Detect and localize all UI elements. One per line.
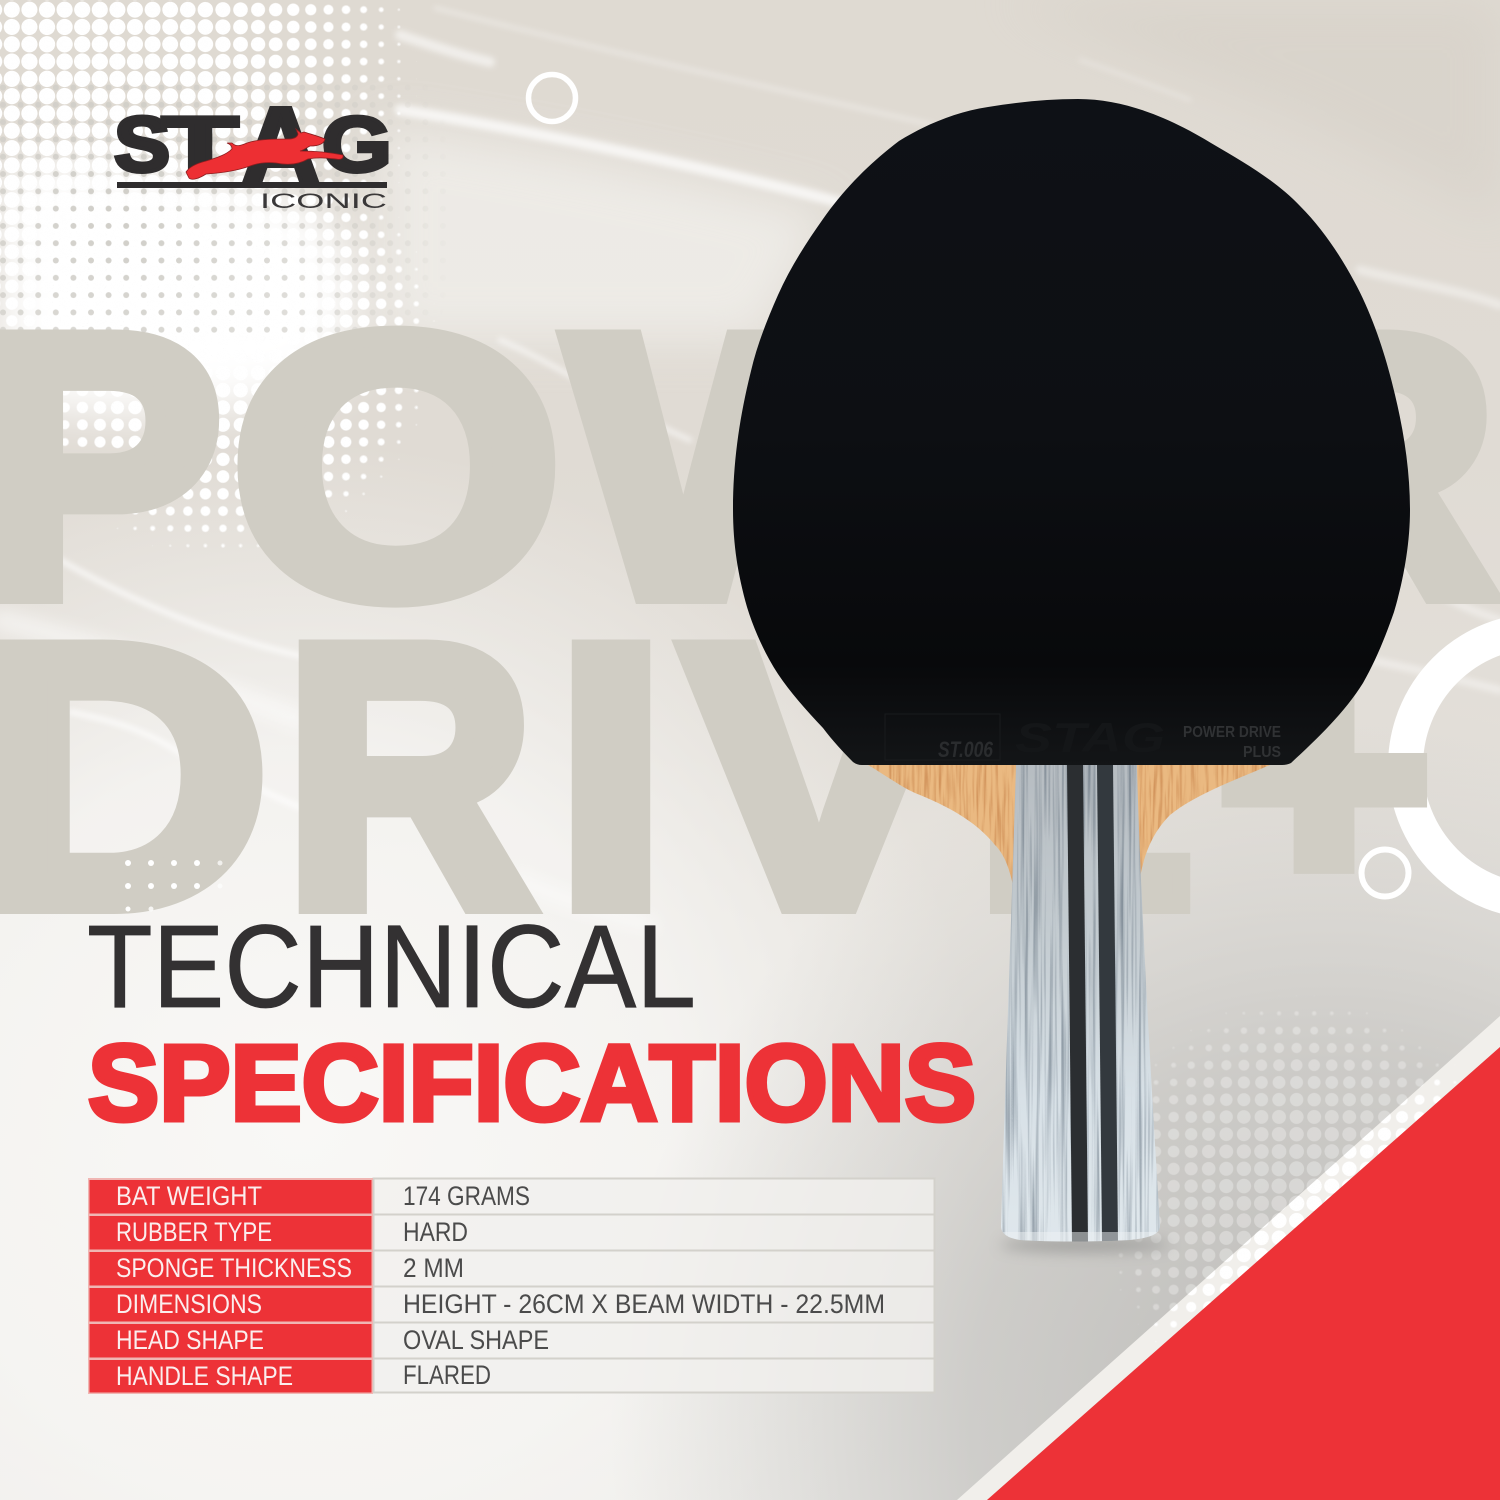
table row: sponge thickness: [90, 1252, 934, 1286]
logo leaping stag: [186, 129, 343, 179]
halftone dots on the white band: [1154, 1080, 1456, 1328]
background word: POWER: E: [1000, 260, 1247, 673]
table row: rubber type: [90, 1216, 934, 1250]
logo wordmark: A: [240, 84, 322, 210]
heading line 2: SPECIFICATIONS: SPECIFICATIONS: [88, 1022, 976, 1143]
halftone dots: lower right: [1119, 1012, 1438, 1324]
table tennis bat: [733, 99, 1410, 1252]
logo underline: [117, 182, 387, 188]
table row: dimensions: [90, 1288, 934, 1322]
logo wordmark: S: [114, 102, 170, 188]
table row: dimensions: HEIGHT - 26CM X BEAM WIDTH - 22.5MM: [403, 1289, 885, 1319]
background word: DRIVE+: [0, 569, 1432, 983]
decorative ring: small top: [528, 74, 576, 122]
table row: rubber type: RUBBER TYPE: [116, 1217, 272, 1247]
table value column background: [374, 1178, 934, 1392]
heading: [87, 901, 976, 1143]
background word: POWER: O: [232, 260, 562, 673]
logo wordmark: [114, 84, 392, 210]
bat rubber embossed marks: PLUS: [1243, 744, 1281, 761]
background word: DRIVE+: +: [1216, 589, 1432, 962]
bat rubber embossed marks: POWER DRIVE: [1183, 724, 1281, 741]
bat rubber embossed marks: [885, 714, 1281, 762]
table row: handle shape: [90, 1360, 491, 1392]
table row: head shape: OVAL SHAPE: [403, 1325, 549, 1355]
table row: rubber type: HARD: [403, 1217, 468, 1247]
table row: bat weight: BAT WEIGHT: [116, 1181, 262, 1211]
table row: bat weight: 174 GRAMS: [403, 1181, 530, 1211]
table row: sponge thickness: SPONGE THICKNESS: [116, 1253, 352, 1283]
table row: head shape: HEAD SHAPE: [116, 1325, 264, 1355]
background word: DRIVE+: I: [556, 570, 666, 983]
logo wordmark: G: [322, 100, 392, 188]
bat rubber embossed marks: ST.006: [938, 737, 994, 762]
background word: DRIVE+: V: [684, 570, 955, 983]
red corner triangle: [987, 1047, 1500, 1500]
background word: POWER: [0, 259, 1497, 673]
logo sub-brand: ICONIC: [260, 190, 387, 213]
table label column background: [88, 1178, 373, 1394]
table row: bat weight: [90, 1180, 934, 1214]
white diagonal band: [957, 1016, 1500, 1500]
specifications table: [88, 1178, 934, 1394]
table row: handle shape: FLARED: [403, 1360, 491, 1390]
background word: DRIVE+: R: [285, 570, 534, 983]
bat rubber embossed marks: STAG: [1015, 714, 1165, 761]
logo: Stag Iconic: [114, 84, 392, 213]
heading line 1: TECHNICAL: TECHNICAL: [87, 901, 696, 1033]
table row: handle shape: HANDLE SHAPE: [116, 1361, 293, 1391]
table row: head shape: [90, 1324, 934, 1358]
decorative ring: large right: [1406, 630, 1500, 902]
bat handle shadow: [1000, 1238, 1170, 1252]
logo wordmark: T: [162, 101, 238, 188]
bat wood shoulders: [868, 765, 1270, 883]
table row: sponge thickness: 2 MM: [403, 1253, 464, 1283]
decorative ring: small right: [1362, 850, 1408, 896]
bat rubber blade: [733, 99, 1410, 765]
background word: POWER: W: [569, 260, 975, 673]
background word: POWER: R: [1240, 259, 1497, 673]
background word: DRIVE+: E: [977, 570, 1194, 983]
halftone dots: lower left over the letter D: [125, 860, 222, 912]
bat handle: [1001, 765, 1160, 1242]
halftone dots: top left: [0, 0, 434, 548]
table row: dimensions: DIMENSIONS: [116, 1289, 262, 1319]
